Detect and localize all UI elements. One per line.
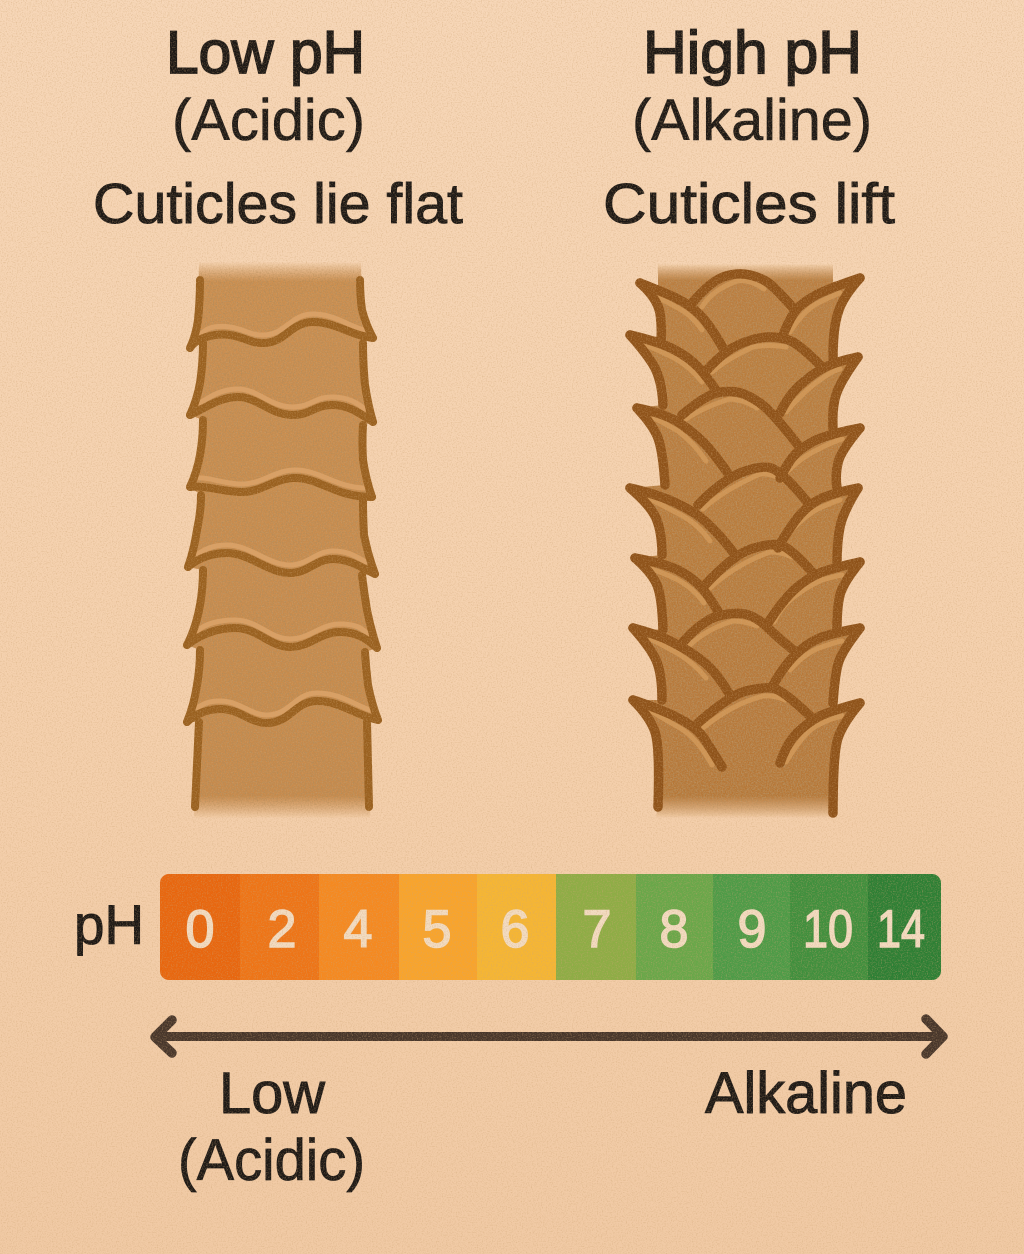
scale numbers: 2	[268, 900, 296, 959]
scale numbers: 4	[344, 900, 372, 959]
double-headed arrow	[155, 1019, 943, 1054]
scale numbers: 0	[186, 900, 214, 959]
axis label: alkaline: Alkaline	[705, 1061, 907, 1126]
heading: high pH column	[603, 19, 895, 236]
title: Low pH: Low pH	[166, 19, 365, 86]
strand body	[630, 264, 860, 818]
caption: cuticles lie flat: Cuticles lie flat	[93, 172, 463, 236]
caption: cuticles lift: Cuticles lift	[603, 172, 895, 236]
strand body	[187, 262, 378, 818]
axis label: low acidic: Low	[219, 1061, 326, 1126]
scale numbers: 9	[738, 900, 766, 959]
side scale upper edges	[630, 278, 860, 767]
title: High pH: High pH	[643, 19, 862, 86]
heading: low pH column	[93, 19, 463, 236]
outer scale edges	[630, 278, 860, 813]
scale numbers: 5	[422, 900, 452, 959]
colour segments	[160, 874, 941, 980]
scale numbers: 10	[803, 900, 853, 959]
center scale arches	[682, 274, 820, 723]
axis label: low acidic	[178, 1061, 365, 1193]
subtitle: Alkaline: (Alkaline)	[632, 88, 872, 153]
pH scale bar	[160, 874, 941, 980]
scale numbers	[186, 900, 925, 959]
cuticle wave edges	[187, 322, 378, 723]
cuticle side edges	[187, 280, 378, 807]
scale numbers: 6	[500, 900, 530, 959]
scale numbers: 8	[660, 900, 688, 959]
scale numbers: 14	[877, 900, 925, 959]
scale numbers: 7	[582, 900, 612, 959]
hair strand: flat cuticles	[187, 262, 378, 818]
scale highlights	[646, 281, 842, 765]
subtitle: Acidic: (Acidic)	[172, 88, 365, 153]
cuticle highlights	[197, 314, 370, 715]
pH label: pH	[74, 893, 144, 956]
axis label: low acidic: (Acidic)	[178, 1128, 365, 1193]
hair strand: lifted cuticles	[630, 264, 860, 818]
